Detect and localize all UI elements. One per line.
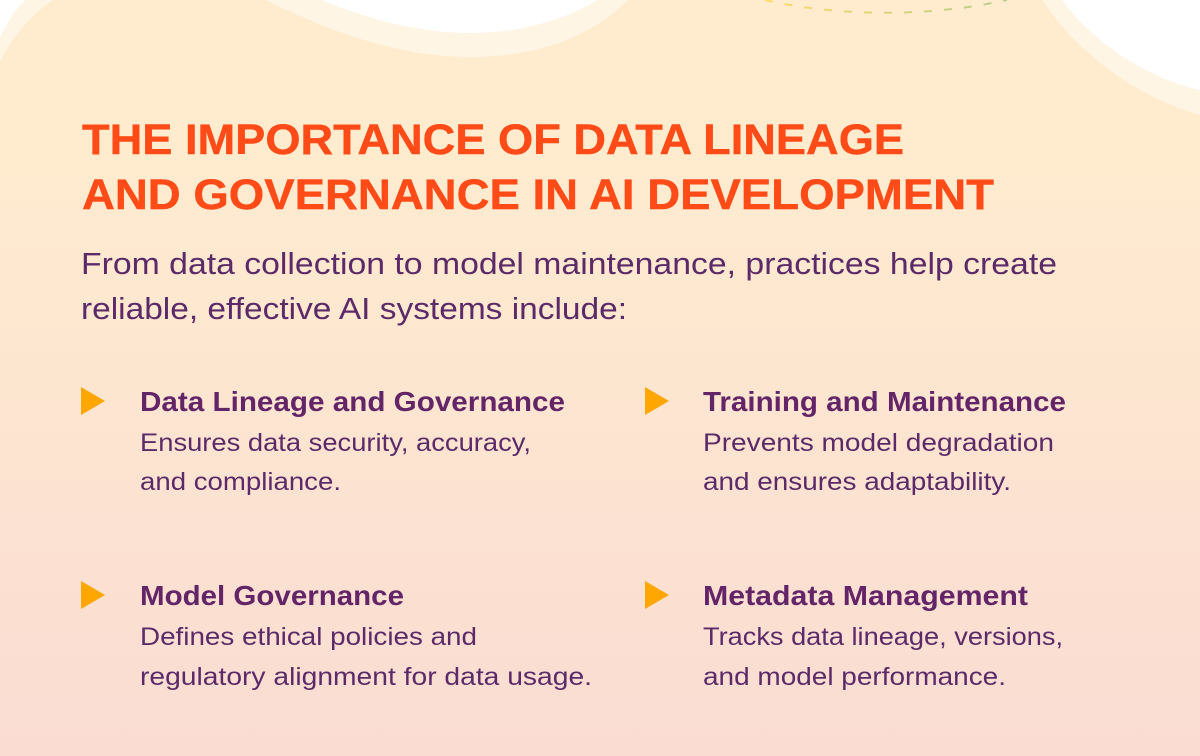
item text: Tracks data lineage, versions, — [703, 623, 1063, 651]
item text: regulatory alignment for data usage. — [140, 663, 592, 691]
icon: arrow — [645, 581, 669, 609]
item text — [140, 623, 592, 691]
title: AND GOVERNANCE IN AI DEVELOPMENT — [82, 171, 994, 219]
item text: Ensures data security, accuracy, — [140, 429, 531, 457]
icon: arrow — [645, 387, 669, 415]
item heading: Metadata Management — [703, 580, 1028, 611]
dashed decorative arc — [765, 0, 1007, 13]
subtitle — [81, 246, 1057, 326]
subtitle: reliable, effective AI systems include: — [81, 291, 627, 326]
item: Model Governance — [81, 580, 592, 691]
icon: arrow — [81, 387, 105, 415]
item text: and model performance. — [703, 663, 1006, 691]
subtitle: From data collection to model maintenance, practices help create — [81, 246, 1057, 281]
item text: and ensures adaptability. — [703, 468, 1011, 496]
title — [82, 116, 994, 219]
icon: arrow — [81, 581, 105, 609]
item heading: Data Lineage and Governance — [140, 386, 565, 417]
item: Training and Maintenance — [645, 386, 1066, 496]
item text: and compliance. — [140, 468, 341, 496]
title: THE IMPORTANCE OF DATA LINEAGE — [82, 116, 904, 164]
item text: Defines ethical policies and — [140, 623, 477, 651]
item text — [703, 623, 1063, 691]
item: Metadata Management — [645, 580, 1063, 691]
item text — [140, 429, 531, 496]
item heading: Model Governance — [140, 580, 404, 611]
item text: Prevents model degradation — [703, 429, 1054, 457]
item: Data Lineage and Governance — [81, 386, 565, 496]
item text — [703, 429, 1054, 496]
item heading: Training and Maintenance — [703, 386, 1066, 417]
